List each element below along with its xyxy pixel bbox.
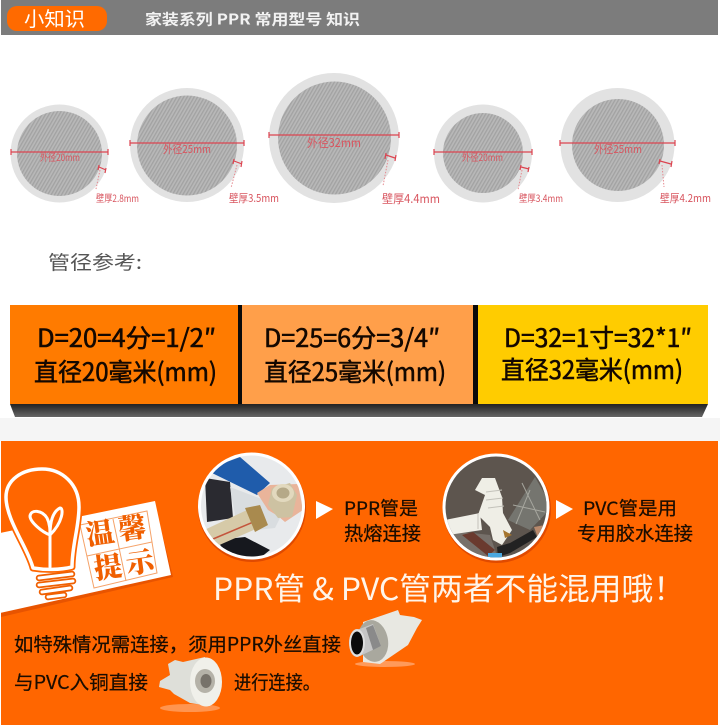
pipe diagram: 20mm, 3.4mm wall [434, 104, 563, 205]
pipe diagram: 20mm, 2.8mm wall: 壁厚2.8mm [96, 190, 139, 205]
cell: 25mm: D=25=6分=3/4″ [264, 319, 440, 355]
pipe diagram: 20mm, 2.8mm wall: 外径20mm [40, 149, 80, 164]
text: PVC glue note [577, 495, 693, 546]
cell: 32mm [478, 305, 708, 404]
panel: warm tip [0, 441, 718, 725]
photo: PPR heat-fusion joint [198, 450, 306, 562]
text: connection note end: 进行连接。 [234, 668, 320, 695]
icon: male threaded fitting [349, 610, 422, 667]
icon: light bulb [6, 469, 79, 597]
pipe diagram: 32mm, 4.4mm wall: 壁厚4.4mm [382, 190, 440, 207]
heading: pipe diameter reference: 管径参考: [48, 248, 142, 275]
tag: warm tip ribbon: 温 [83, 510, 117, 554]
tag: warm tip ribbon: 示 [123, 539, 159, 583]
tag: warm tip ribbon: 馨 [115, 505, 149, 549]
cell: 32mm: 直径32毫米(mm) [501, 351, 683, 387]
cell: 32mm: D=32=1寸=32*1″ [504, 319, 692, 355]
pipe diagram: 32mm, 4.4mm wall [269, 73, 440, 207]
arrow: PVC [556, 500, 573, 519]
pipe diagram: 25mm, 3.5mm wall [130, 88, 279, 206]
cell: 25mm [242, 305, 473, 404]
text: PPR heat-fusion note: PPR管是 [344, 495, 418, 521]
headline: do not mix: PPR管 & PVC管两者不能混用哦！ [213, 564, 685, 609]
pipe diagram: 25mm, 3.5mm wall: 壁厚3.5mm [229, 190, 279, 206]
pipe diagram: 20mm, 3.4mm wall: 壁厚3.4mm [519, 190, 563, 205]
tag: warm tip ribbon [0, 501, 173, 617]
header bar: 小知识 [24, 3, 85, 32]
cell: 20mm: 直径20毫米(mm) [34, 353, 217, 389]
header bar [1, 0, 718, 35]
pipe diagram: 25mm, 4.2mm wall: 外径25mm [594, 141, 642, 157]
text: PVC glue note: 专用胶水连接 [577, 519, 693, 546]
tag: warm tip ribbon: 提 [91, 544, 125, 588]
cell: 20mm: D=20=4分=1/2″ [37, 319, 216, 355]
text: connection note line 1: 如特殊情况需连接，须用PPR外丝直接 [14, 630, 341, 657]
pipe diagram: 20mm, 2.8mm wall [10, 104, 139, 205]
pipe diagram: 20mm, 3.4mm wall: 外径20mm [462, 149, 503, 164]
pipe diagram: 32mm, 4.4mm wall: 外径32mm [307, 134, 361, 151]
icon: female threaded fitting [159, 657, 222, 712]
text: connection note line 2: 与PVC入铜直接 [14, 668, 148, 695]
cell: 25mm: 直径25毫米(mm) [264, 353, 446, 389]
text: PVC glue note: PVC管是用 [583, 495, 677, 521]
text: PPR heat-fusion note [344, 495, 421, 546]
header bar: 家装系列 PPR 常用型号 知识 [145, 8, 360, 30]
text: PPR heat-fusion note: 热熔连接 [344, 519, 421, 546]
cell: 20mm [10, 305, 238, 404]
size reference table [0, 305, 720, 441]
pipe diagram: 25mm, 4.2mm wall [560, 88, 711, 206]
pipe diagram: 25mm, 4.2mm wall: 壁厚4.2mm [660, 190, 711, 206]
photo: PVC glued joint [442, 454, 551, 563]
pipe diagram: 25mm, 3.5mm wall: 外径25mm [163, 141, 211, 157]
arrow: PPR [316, 501, 333, 519]
